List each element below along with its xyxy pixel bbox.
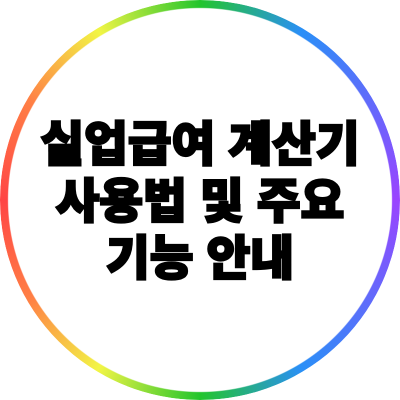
title line 2: 사용법 및 주요 [56, 176, 344, 228]
title line 3: 기능 안내 [106, 232, 294, 286]
title line 1: 실업급여 계산기 [40, 118, 360, 172]
title [40, 118, 360, 286]
